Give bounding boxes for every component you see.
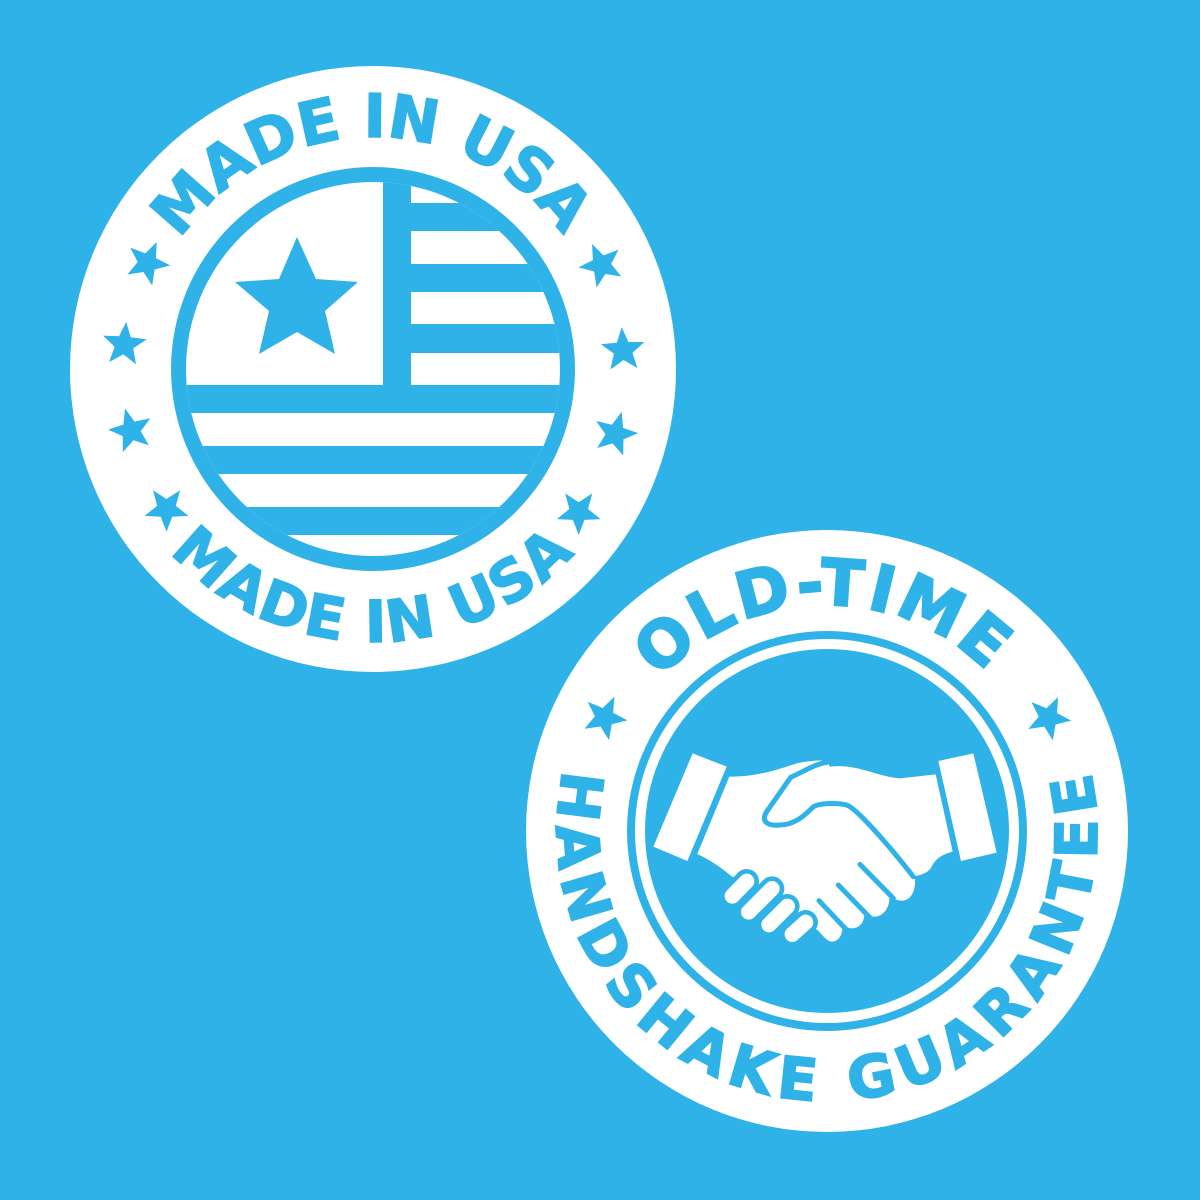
badge: made in usa xyxy=(70,66,676,672)
badge: handshake guarantee xyxy=(526,530,1128,1132)
top text: OLD-TIME xyxy=(638,556,1015,670)
top text: MADE IN USA xyxy=(148,92,588,236)
fingers xyxy=(732,881,806,934)
bottom text: MADE IN USA xyxy=(172,524,576,643)
thumb and finger lines xyxy=(764,762,913,930)
finger outlines xyxy=(732,881,806,934)
badge disc xyxy=(70,66,676,672)
flag star xyxy=(235,237,358,354)
badge disc xyxy=(526,530,1128,1132)
stars ring xyxy=(101,233,646,540)
bottom text: HANDSHAKE GUARANTEE xyxy=(554,774,1098,1102)
flag emblem xyxy=(171,167,581,571)
left cuff xyxy=(653,753,727,861)
right cuff xyxy=(938,753,997,861)
hands xyxy=(697,761,953,942)
rings xyxy=(627,631,1027,1031)
stars xyxy=(577,687,1078,744)
icon: handshake xyxy=(653,753,997,942)
